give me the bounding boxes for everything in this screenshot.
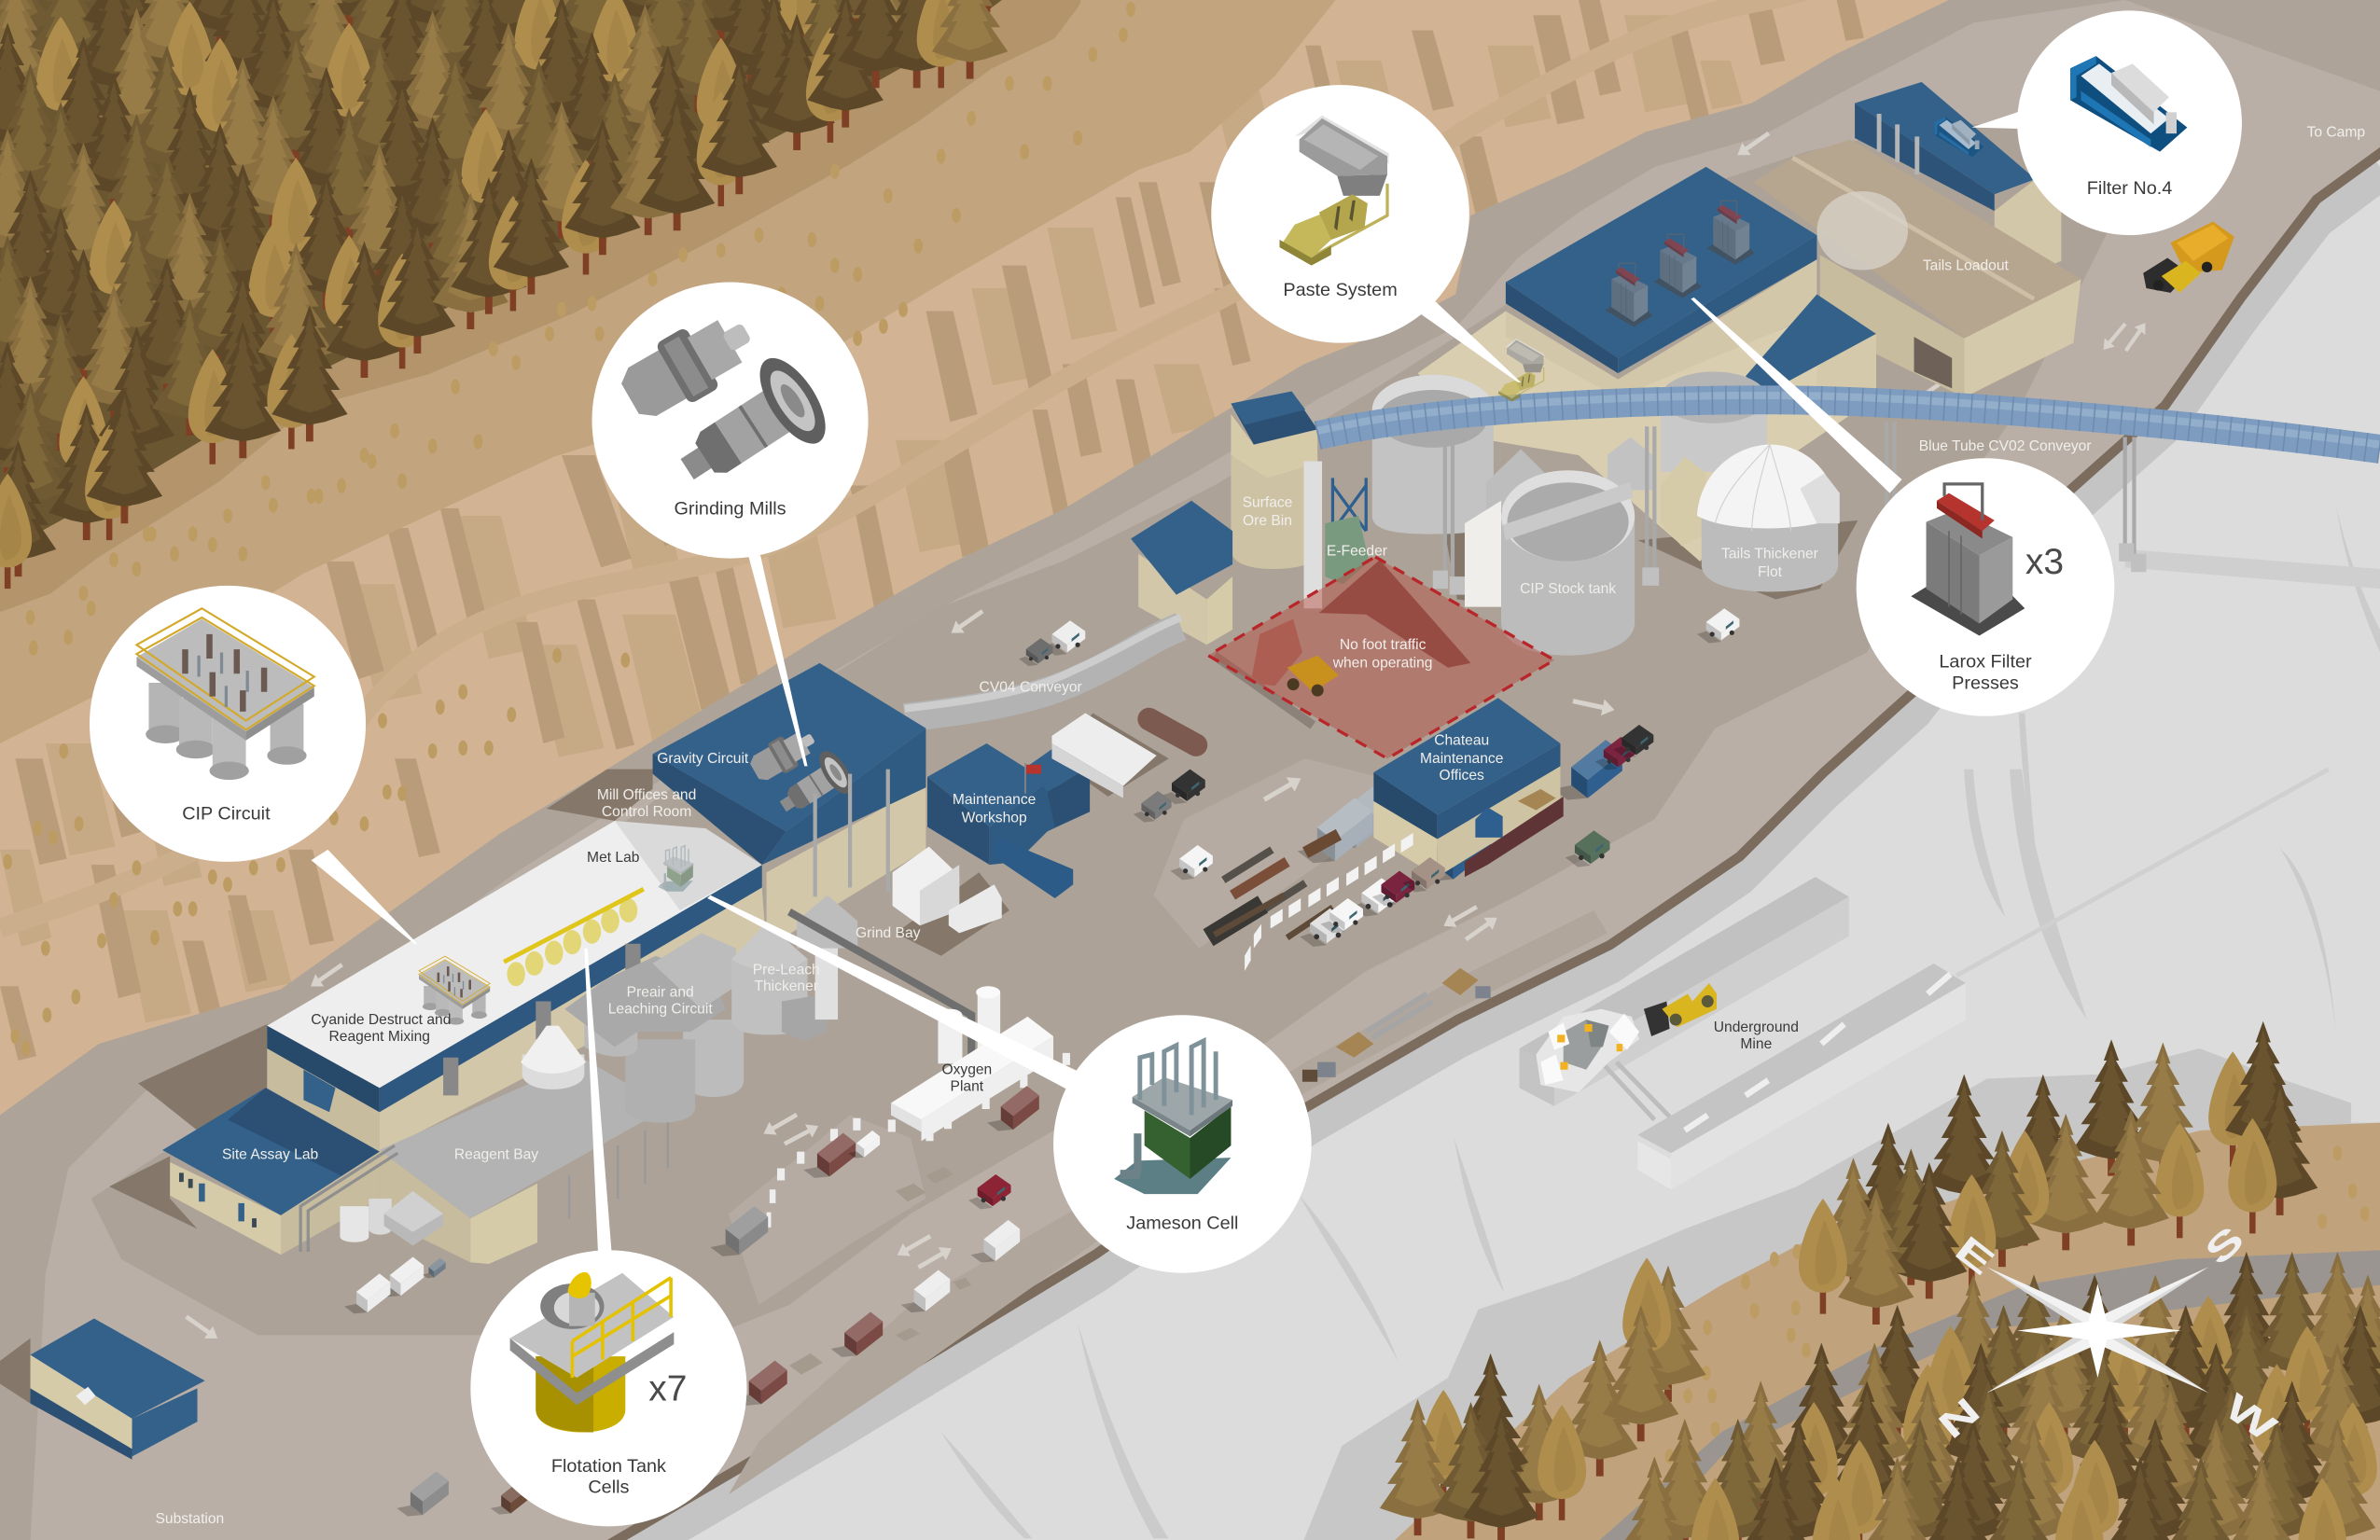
compass rose: N — [1930, 1389, 1987, 1447]
bank edge — [607, 147, 2380, 1540]
maintenance workshop — [927, 743, 1090, 898]
callout: Filter No.4 — [2017, 10, 2242, 235]
map labels: Grind Bay — [856, 925, 921, 941]
jameson cell mini on roof — [658, 846, 693, 892]
map labels: Oxygen — [941, 1062, 992, 1078]
building: Tails Loadout — [1753, 140, 2081, 397]
map labels: Ore Bin — [1243, 513, 1292, 529]
map labels: Maintenance — [1420, 751, 1503, 767]
callout: Jameson Cell — [1053, 1015, 1312, 1273]
building: filter press hall cream base — [1418, 311, 1876, 562]
map labels: Offices — [1440, 768, 1484, 784]
lower right shaded ground — [1304, 1048, 2380, 1540]
map labels: CIP Stock tank — [1520, 581, 1616, 597]
building: filter press hall — [1506, 167, 1876, 409]
callout: Larox Filter Presses: x3 — [2025, 542, 2064, 582]
cone silo — [521, 1026, 586, 1089]
map labels: Mine — [1740, 1036, 1772, 1052]
flotation row mini on roof — [504, 889, 644, 986]
slope scrub dots — [3, 2, 1135, 1056]
main mill building — [267, 821, 767, 1153]
callout: Flotation Tank Cells: Cells — [588, 1478, 630, 1498]
CIP circuit mini on roof — [419, 956, 490, 1025]
surface ore bin — [1231, 392, 1366, 608]
bank yard strip — [729, 910, 1608, 1494]
compass rose: S — [2196, 1217, 2252, 1273]
blue tube CV02 conveyor — [1317, 395, 2380, 449]
map labels: Reagent Bay — [454, 1147, 538, 1163]
map labels: Tails Thickener — [1721, 547, 1818, 562]
callout: Jameson Cell: Jameson Cell — [1126, 1214, 1238, 1234]
compass rose — [1930, 1217, 2285, 1450]
callout: CIP Circuit: CIP Circuit — [182, 803, 271, 824]
CIP stock tank — [1465, 470, 1635, 656]
map labels: E-Feeder — [1327, 543, 1387, 559]
callout: Paste System: Paste System — [1283, 280, 1398, 300]
site central pad — [91, 121, 2125, 1335]
snow field — [607, 147, 2380, 1540]
map labels: Workshop — [962, 811, 1027, 826]
cliff mid-tone stripes — [0, 15, 1743, 1022]
map labels: Maintenance — [953, 792, 1036, 808]
callout: Larox Filter Presses: Presses — [1952, 673, 2019, 693]
grind bay cone — [797, 895, 857, 949]
map labels: Thickener — [754, 978, 818, 994]
paste system mini on map — [1498, 339, 1544, 402]
map labels: Reagent Mixing — [328, 1029, 430, 1045]
gravity circuit building — [653, 663, 926, 949]
forest canopy base — [0, 0, 1002, 554]
map labels: Cyanide Destruct and — [311, 1012, 451, 1028]
callout: Larox Filter Presses: Larox Filter — [1939, 652, 2032, 673]
oversize stockpile — [1251, 560, 1470, 686]
snow scratch marks — [941, 506, 2380, 1538]
callout: Larox Filter Presses — [1857, 458, 2114, 716]
map labels: Met Lab — [587, 850, 640, 866]
map labels: Substation — [155, 1511, 224, 1527]
assay yard tanks and box — [340, 1191, 443, 1245]
oxygen plant — [767, 986, 1070, 1228]
callout: Grinding Mills — [592, 283, 869, 559]
callout: Flotation Tank Cells: x7 — [648, 1368, 687, 1408]
callout: Flotation Tank Cells — [470, 1250, 746, 1526]
oxygen plant pipe — [789, 912, 971, 1063]
callout: Flotation Tank Cells: Flotation Tank — [551, 1456, 666, 1477]
forest: upper left — [0, 0, 1024, 589]
map labels: Surface — [1243, 494, 1292, 510]
building shadows — [0, 508, 1858, 1404]
callout: Paste System — [1211, 85, 1469, 343]
map labels: Blue Tube CV02 Conveyor — [1919, 438, 2092, 454]
preair and leaching circuit tanks — [564, 933, 744, 1123]
lower right tan ground — [1395, 1123, 2380, 1540]
mine tunnel upper — [1520, 877, 1849, 1106]
building: Filter No.4 — [1855, 82, 2061, 288]
loader in zone — [1287, 656, 1339, 697]
yard light road strip — [729, 758, 1397, 1305]
CV04 conveyor — [905, 617, 1181, 717]
vehicles and material piles — [789, 608, 1739, 1375]
compass rose: W — [2218, 1385, 2285, 1450]
conveyor shadow on snow — [2125, 549, 2380, 589]
map labels: Mill Offices and — [597, 787, 696, 803]
grind bay white boxes — [893, 847, 1002, 933]
yard containers and boxes — [344, 740, 1622, 1517]
mine tunnel lower — [1601, 964, 1966, 1189]
haul truck near filter building — [2143, 221, 2234, 293]
forest: lower right grove — [1380, 1021, 2317, 1540]
chateau maintenance offices — [1373, 698, 1564, 877]
map labels: Flot — [1758, 564, 1783, 580]
map labels: Chateau — [1434, 733, 1489, 749]
map labels: Tails Loadout — [1923, 258, 2010, 274]
bank shoulder — [607, 167, 2380, 1540]
river — [1600, 1250, 2380, 1540]
callout: CIP Circuit — [90, 586, 366, 862]
reagent bay building — [380, 1059, 668, 1264]
no foot traffic zone — [1208, 557, 1554, 758]
cliff terrace stripes — [0, 0, 1864, 1061]
E-Feeder — [1325, 516, 1369, 584]
conveyor piers — [1445, 422, 2134, 589]
tails thickener — [1697, 445, 1840, 591]
pre-leach thickener — [731, 923, 838, 1041]
map labels: Site Assay Lab — [222, 1147, 319, 1163]
pier foot blocks — [1433, 543, 2146, 595]
white shelter and brown tank — [1051, 714, 1196, 798]
forest slope ground — [0, 0, 1336, 743]
compass rose: E — [1948, 1228, 2002, 1283]
leader lines — [312, 109, 2026, 1254]
building left of ore bin — [1131, 501, 1232, 645]
callout: Filter No.4: Filter No.4 — [2087, 178, 2172, 199]
lower right scrub dots — [1665, 1145, 2370, 1494]
callout: Grinding Mills: Grinding Mills — [674, 498, 786, 519]
blasted rock — [1536, 1009, 1639, 1092]
forest: lower right dense stand — [1617, 1252, 2380, 1540]
underground loader — [1644, 983, 1717, 1036]
thin connector line to surface — [1956, 770, 2329, 976]
conveyor into stockpile — [1215, 656, 1313, 726]
map labels: when operating — [1332, 656, 1432, 672]
tank group behind conveyor — [1372, 372, 1767, 547]
map labels: No foot traffic — [1340, 637, 1427, 653]
map labels: Control Room — [602, 804, 691, 820]
cliff ledge — [0, 0, 1821, 928]
map labels: Pre-Leach — [753, 962, 820, 978]
site assay lab — [162, 1088, 397, 1255]
map labels: Underground — [1714, 1020, 1799, 1035]
map labels: Plant — [951, 1079, 984, 1095]
map labels: Preair and — [627, 985, 694, 1001]
map labels: Gravity Circuit — [657, 751, 749, 767]
substation building — [31, 1319, 205, 1460]
map labels: CV04 Conveyor — [980, 680, 1082, 696]
map labels: To Camp — [2307, 124, 2365, 140]
arrows: road direction — [182, 127, 2150, 1345]
map labels: Leaching Circuit — [608, 1002, 713, 1018]
forest shadow — [0, 0, 1070, 601]
